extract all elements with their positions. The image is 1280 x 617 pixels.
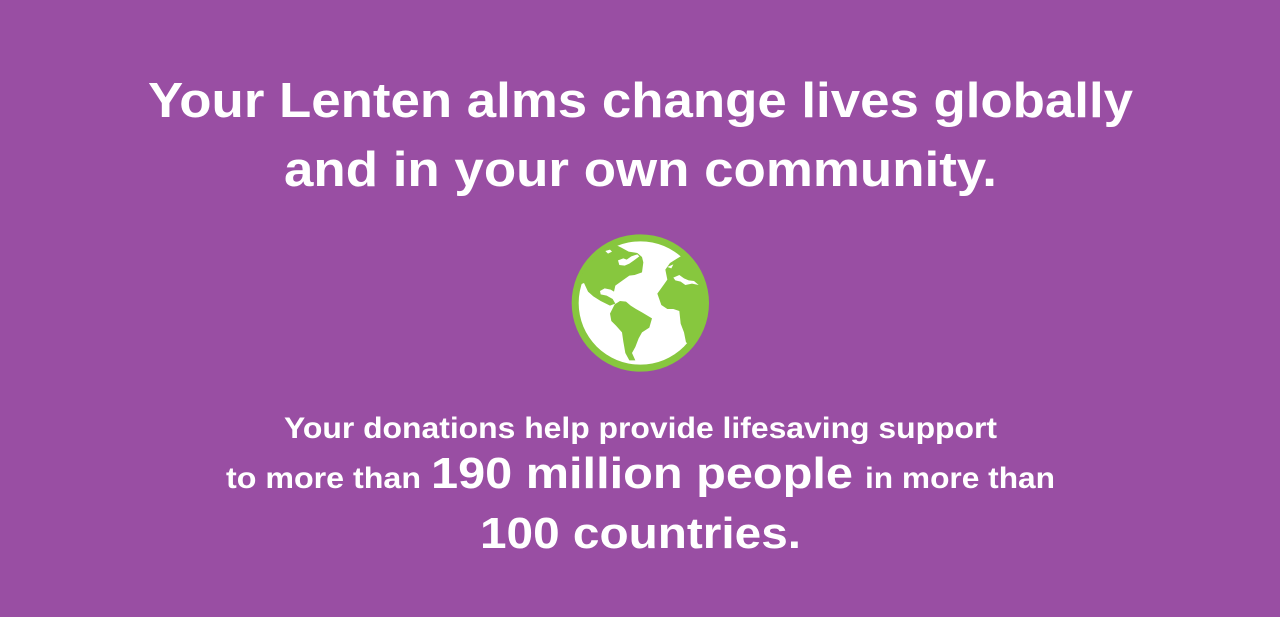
supporting text: 100 countries. <box>480 509 801 558</box>
title: Your Lenten alms change lives globally <box>148 74 1133 128</box>
supporting text: 190 million people <box>431 449 853 498</box>
africa and europe <box>657 254 705 345</box>
white arctic patches <box>618 254 639 266</box>
supporting text <box>226 412 1055 558</box>
supporting text: in more than <box>865 462 1055 495</box>
title <box>148 74 1133 197</box>
icon: globe <box>572 234 709 372</box>
supporting text: to more than <box>226 462 421 495</box>
title: and in your own community. <box>284 143 997 197</box>
supporting text: Your donations help provide lifesaving support <box>284 412 997 445</box>
south america <box>610 301 652 360</box>
north america <box>577 242 643 306</box>
mediterranean <box>673 275 699 285</box>
